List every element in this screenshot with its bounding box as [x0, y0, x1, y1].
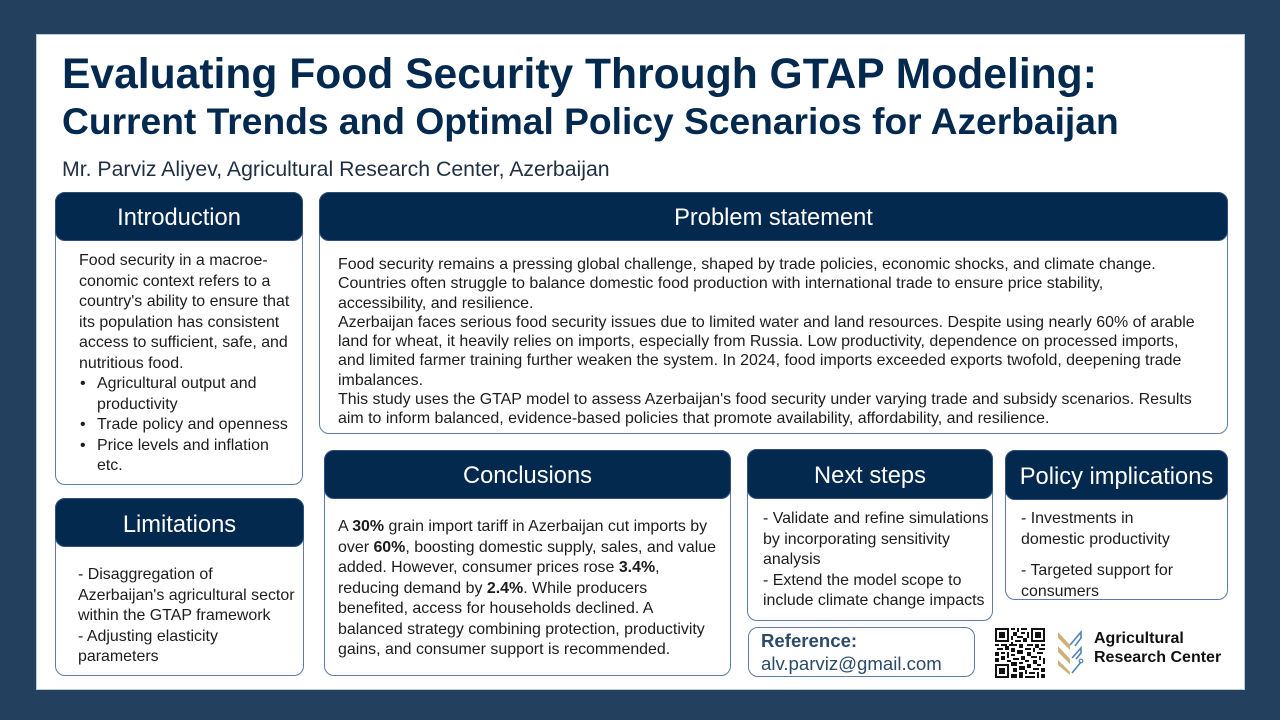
panel: policy implications — [1005, 450, 1228, 600]
logo text — [1094, 630, 1221, 666]
text: introduction body: productivity — [97, 396, 178, 412]
icon: QR code — [995, 628, 1045, 678]
text: limitations body: Azerbaijan's agricultural sector — [78, 586, 295, 604]
text: conclusions body: balanced strategy combining protection, productivity — [338, 620, 705, 638]
heading: policy implications — [1005, 450, 1228, 500]
text: policy implications body: - Investments in — [1021, 510, 1134, 527]
text: conclusions body: over 60%, boosting domestic supply, sales, and value — [338, 538, 716, 556]
text: limitations body: - Adjusting elasticity — [78, 628, 218, 644]
text: conclusions body: gains, and consumer support is recommended. — [338, 641, 670, 658]
text: problem statement body: Azerbaijan faces serious food security issues due to limited water and land resources. Despite using nearly 60% of arable — [338, 314, 1195, 331]
text: introduction body: conomic context refers to a — [79, 272, 270, 290]
panel: conclusions — [324, 450, 731, 676]
title: Current Trends and Optimal Policy Scenarios for Azerbaijan — [62, 100, 1119, 142]
panel: limitations — [55, 498, 304, 676]
text: limitations body: parameters — [78, 648, 159, 665]
text: introduction body: Price levels and inflation — [97, 436, 269, 454]
text: conclusions body: reducing demand by 2.4%. While producers — [338, 580, 647, 596]
author line: Mr. Parviz Aliyev, Agricultural Research Center, Azerbaijan — [62, 157, 610, 181]
text: limitations body: - Disaggregation of — [78, 566, 213, 583]
heading: next steps — [747, 449, 993, 499]
text: problem statement body: imbalances. — [338, 372, 423, 389]
text: limitations body — [78, 566, 295, 665]
text: introduction body: • — [80, 416, 86, 433]
text: policy implications body — [1021, 510, 1173, 600]
text: introduction body: country's ability to ensure that — [79, 293, 289, 310]
panel: introduction — [55, 192, 303, 485]
text: introduction body: • — [80, 436, 86, 454]
icon: wheat logo — [1058, 630, 1084, 675]
heading: limitations: Limitations — [123, 512, 236, 538]
logo text: Research Center — [1094, 649, 1221, 666]
text: problem statement body: accessibility, and resilience. — [338, 295, 533, 312]
text: conclusions body: added. However, consumer prices rose 3.4%, — [338, 559, 660, 576]
reference email: alv.parviz@gmail.com — [761, 653, 942, 674]
text: introduction body: • — [80, 375, 86, 392]
text: policy implications body: domestic productivity — [1021, 530, 1170, 548]
text: introduction body: Trade policy and openness — [97, 416, 288, 433]
text: problem statement body: aim to inform balanced, evidence-based policies that promote availability, affordability, and resilience. — [338, 410, 1049, 427]
text: next steps body: - Validate and refine simulations — [763, 510, 989, 527]
title: Evaluating Food Security Through GTAP Modeling: — [62, 50, 1097, 98]
text: problem statement body: and limited farmer training further weaken the system. In 2024, food imports exceeded exports twofold, deepening trade — [338, 352, 1181, 369]
logo text: Agricultural — [1094, 630, 1184, 647]
heading: conclusions — [324, 450, 731, 499]
heading: introduction — [55, 192, 303, 241]
heading: policy implications: Policy implications — [1020, 464, 1213, 490]
heading: conclusions: Conclusions — [463, 463, 592, 489]
heading: introduction: Introduction — [117, 205, 241, 231]
text: next steps body: by incorporating sensitivity — [763, 530, 950, 548]
text: introduction body — [79, 252, 290, 474]
text: limitations body: within the GTAP framework — [78, 607, 270, 624]
text: conclusions body: A 30% grain import tariff in Azerbaijan cut imports by — [338, 518, 707, 535]
text: problem statement body: land for wheat, it heavily relies on imports, especially from Russia. Low productivity, dependence on processed imports, — [338, 333, 1178, 350]
panel: problem statement — [319, 192, 1228, 434]
heading: limitations — [55, 498, 304, 547]
text: next steps body — [763, 510, 989, 609]
text: introduction body: its population has consistent — [79, 314, 279, 330]
text: introduction body: access to sufficient, safe, and — [79, 334, 288, 351]
text: problem statement body: Countries often struggle to balance domestic food production with international trade to ensure price stability, — [338, 275, 1103, 292]
text: conclusions body: benefited, access for households declined. A — [338, 600, 653, 617]
reference label: Reference: — [761, 630, 857, 651]
text: introduction body: nutritious food. — [79, 354, 184, 372]
text: introduction body: Agricultural output and — [97, 375, 256, 392]
text: next steps body: analysis — [763, 551, 821, 568]
text: policy implications body: consumers — [1021, 582, 1099, 600]
text: introduction body: Food security in a macroe- — [79, 252, 268, 269]
text: conclusions body — [338, 518, 716, 658]
heading: problem statement: Problem statement — [674, 205, 873, 231]
heading: next steps: Next steps — [814, 462, 926, 488]
text: next steps body: - Extend the model scope to — [763, 572, 961, 588]
text: next steps body: include climate change impacts — [763, 592, 984, 609]
text: problem statement body: Food security remains a pressing global challenge, shaped by trade policies, economic shocks, and climate change. — [338, 256, 1156, 273]
title — [62, 50, 1119, 142]
text: introduction body: etc. — [97, 457, 123, 474]
text: problem statement body: This study uses the GTAP model to assess Azerbaijan's food security under varying trade and subsidy scenarios. Results — [338, 391, 1192, 408]
text: policy implications body: - Targeted support for — [1021, 562, 1173, 579]
text: problem statement body — [338, 256, 1195, 427]
panel: next steps — [747, 449, 993, 621]
heading: problem statement — [319, 192, 1228, 241]
panel: reference — [748, 627, 975, 677]
